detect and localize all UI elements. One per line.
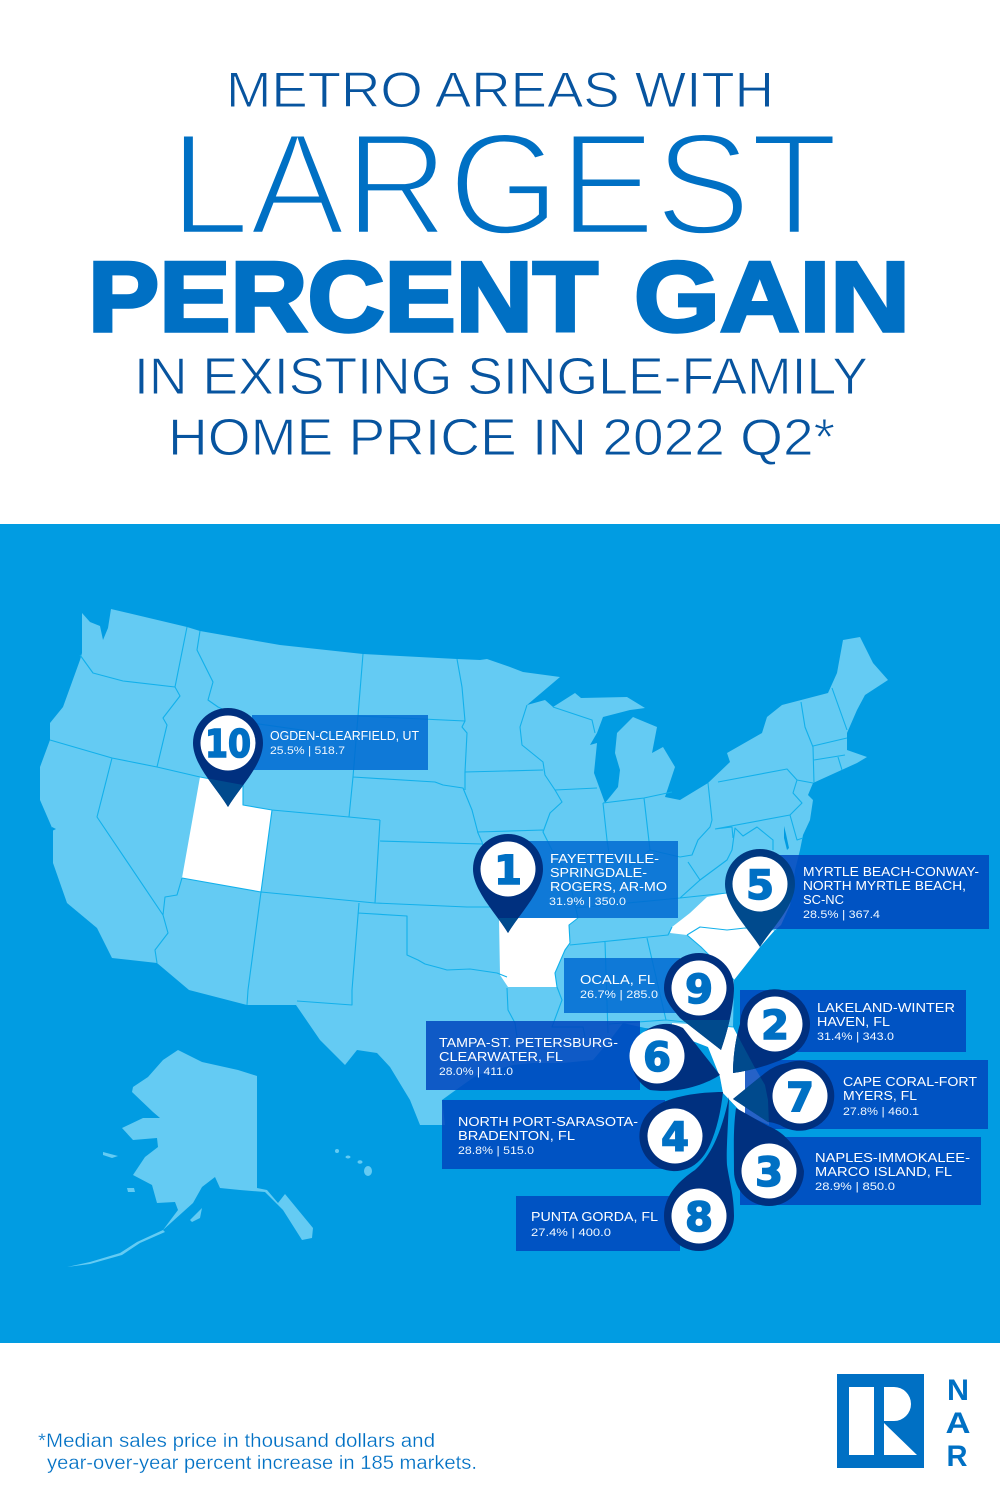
pin 1: 1 (494, 848, 522, 894)
pin 10: 10 (205, 722, 251, 766)
label: cape coral: CAPE CORAL-FORT (843, 1074, 977, 1089)
label: tampa: CLEARWATER, FL (439, 1049, 563, 1064)
label: ocala: 26.7% | 285.0 (580, 989, 658, 1001)
label: myrtle beach: NORTH MYRTLE BEACH, (803, 878, 966, 893)
map: united states (40, 609, 888, 1125)
pin 7 (733, 1061, 834, 1131)
title line: metro areas with: METRO AREAS WITH (226, 62, 774, 118)
label: naples: NAPLES-IMMOKALEE- (815, 1150, 970, 1165)
label: punta gorda: 27.4% | 400.0 (531, 1227, 611, 1239)
footnote: year-over-year percent increase in 185 markets. (47, 1453, 477, 1474)
label: ocala (564, 958, 680, 1013)
panel: map background (0, 524, 1000, 1343)
pin 3 (734, 1108, 804, 1206)
label: ogden-clearfield (252, 715, 428, 770)
label: punta gorda: PUNTA GORDA, FL (531, 1209, 658, 1224)
title line: percent gain: GAIN (634, 241, 910, 352)
label: myrtle beach: SC-NC (803, 892, 844, 907)
label: fayetteville (500, 841, 678, 918)
pin 2: 2 (761, 1003, 789, 1049)
title line: largest: LARGEST (170, 103, 838, 265)
label: lakeland: 31.4% | 343.0 (817, 1031, 894, 1043)
logo: nar letters: N (947, 1374, 969, 1407)
pin 7: 7 (786, 1075, 814, 1121)
pin 5 (725, 849, 795, 947)
label: punta gorda (516, 1196, 680, 1251)
label: fayetteville: ROGERS, AR-MO (550, 879, 667, 894)
pin 9 (664, 953, 734, 1050)
title line: in existing single-family: IN EXISTING SINGLE-FAMILY (134, 348, 868, 406)
map: alaska and hawaii (67, 1050, 372, 1267)
label: myrtle beach: MYRTLE BEACH-CONWAY- (803, 864, 979, 879)
label: north port: NORTH PORT-SARASOTA- (458, 1114, 638, 1129)
label: cape coral: 27.8% | 460.1 (843, 1106, 919, 1118)
logo: realtor r (837, 1374, 924, 1468)
pin 4 (639, 1092, 723, 1171)
logo: nar letters: A (946, 1407, 970, 1440)
pin 10 (193, 708, 263, 807)
label: myrtle beach: 28.5% | 367.4 (803, 909, 880, 921)
pin 8 (664, 1097, 734, 1251)
label: naples: MARCO ISLAND, FL (815, 1164, 952, 1179)
title line: percent gain: PERCENT (88, 241, 598, 352)
pin 2 (733, 989, 810, 1073)
label: myrtle beach (770, 855, 989, 929)
footnote (38, 1431, 477, 1474)
label: fayetteville: SPRINGDALE- (550, 865, 647, 880)
label: lakeland (740, 990, 966, 1052)
pin 4: 4 (661, 1115, 689, 1161)
logo: nar letters (946, 1374, 970, 1473)
label: fayetteville: 31.9% | 350.0 (549, 896, 626, 908)
pin 8: 8 (685, 1195, 713, 1241)
label: cape coral: MYERS, FL (843, 1088, 917, 1103)
logo: nar letters: R (946, 1440, 968, 1473)
label: north port: 28.8% | 515.0 (458, 1145, 534, 1157)
label: tampa: TAMPA-ST. PETERSBURG- (439, 1035, 618, 1050)
label: naples: 28.9% | 850.0 (815, 1181, 895, 1193)
pin 9: 9 (685, 967, 713, 1013)
footnote: *Median sales price in thousand dollars and (38, 1431, 435, 1452)
label: ogden-clearfield: 25.5% | 518.7 (270, 745, 345, 757)
pin 1 (473, 834, 543, 933)
label: ocala: OCALA, FL (580, 972, 655, 987)
title line: percent gain (88, 241, 910, 352)
label: tampa (426, 1021, 640, 1090)
label: naples (740, 1137, 981, 1205)
label: lakeland: HAVEN, FL (817, 1014, 890, 1029)
pin 5: 5 (746, 863, 774, 909)
label: lakeland: LAKELAND-WINTER (817, 1000, 955, 1015)
label: north port: BRADENTON, FL (458, 1128, 575, 1143)
label: fayetteville: FAYETTEVILLE- (550, 851, 659, 866)
label: north port (442, 1100, 665, 1169)
label: cape coral (745, 1060, 988, 1129)
title line: home price: HOME PRICE IN 2022 Q2* (168, 409, 835, 467)
pin 6 (630, 1024, 720, 1091)
label: ogden-clearfield: OGDEN-CLEARFIELD, UT (270, 728, 419, 743)
title (88, 62, 910, 467)
pin 6: 6 (643, 1035, 671, 1081)
label: tampa: 28.0% | 411.0 (439, 1066, 513, 1078)
pin 3: 3 (755, 1150, 783, 1196)
